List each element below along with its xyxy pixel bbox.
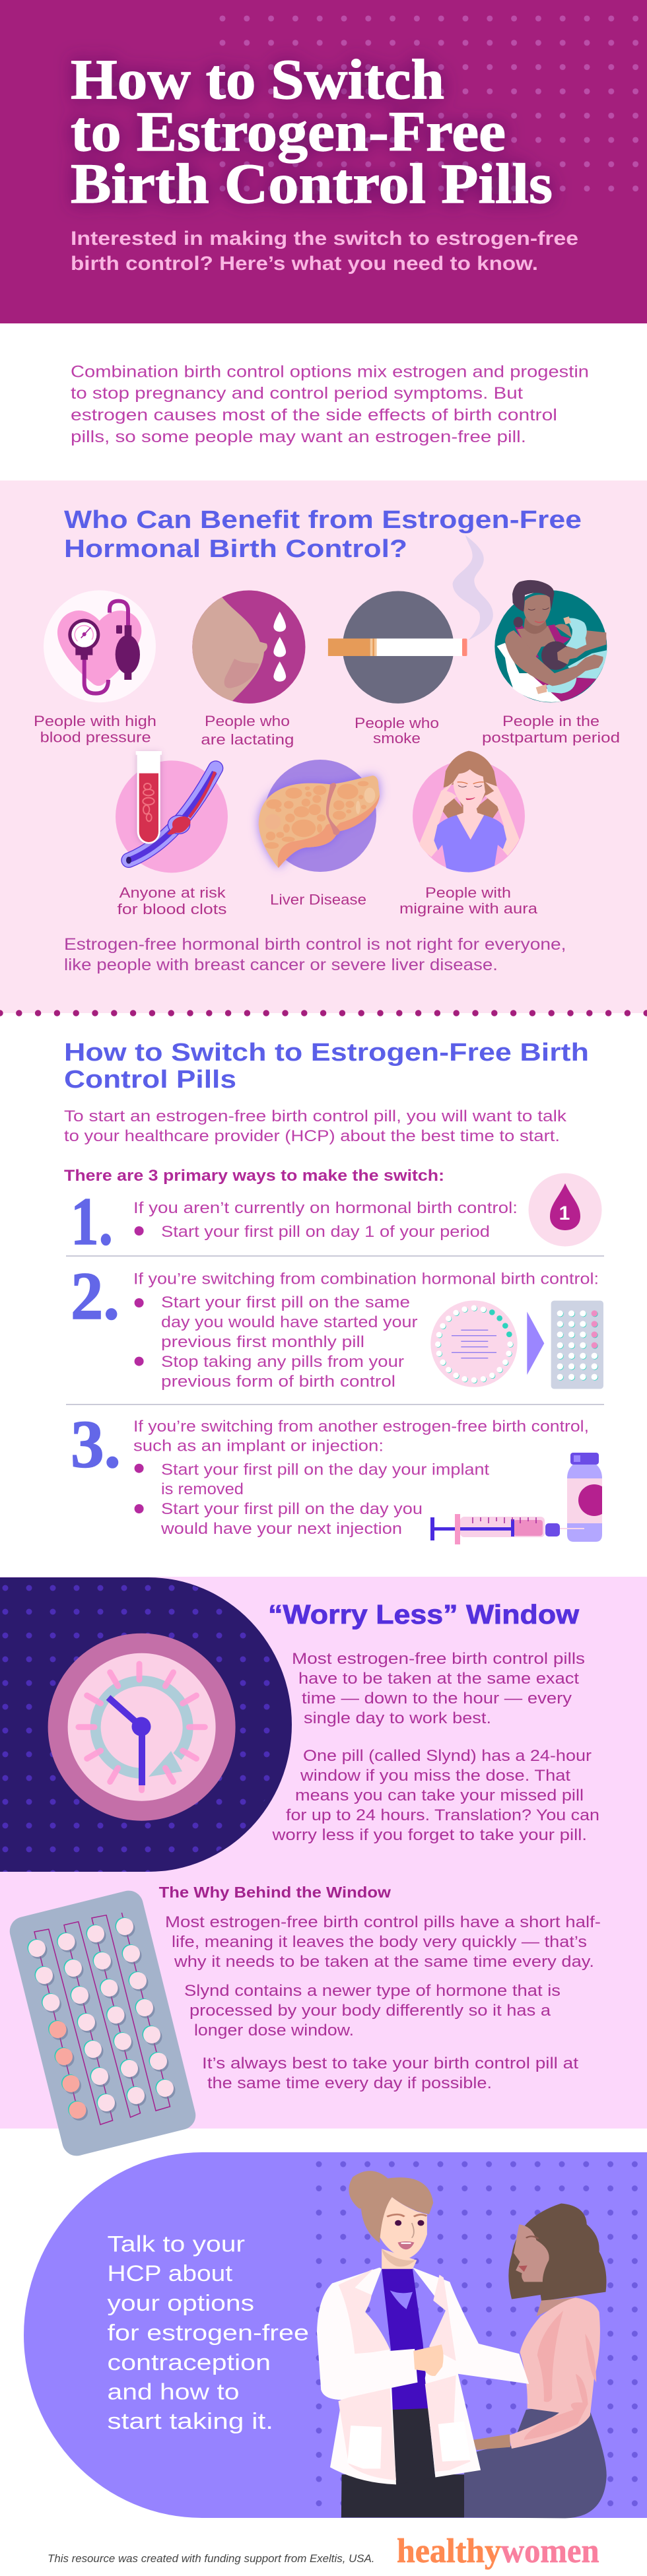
callout text: your options <box>107 2291 254 2316</box>
logo: healthywomen: women <box>501 2532 599 2570</box>
illustration: pill pack <box>7 1888 199 2159</box>
panel: how to switch <box>64 1039 610 1544</box>
icon: lactating <box>192 590 305 704</box>
callout text: start taking it. <box>107 2409 273 2434</box>
panel: worry less window <box>0 1577 647 2129</box>
intro text <box>71 363 589 446</box>
title <box>71 48 553 215</box>
step 2: previous first monthly pill <box>161 1333 364 1351</box>
step 3: If you’re switching from another estrogen-free birth control, <box>133 1418 589 1436</box>
step 1: Start your first pill on day 1 of your period <box>161 1223 490 1241</box>
icon labels: People in the <box>502 713 599 729</box>
heading: who can benefit <box>64 506 582 563</box>
logo: healthywomen: healthy <box>397 2532 501 2570</box>
title: to Estrogen-Free <box>71 100 506 163</box>
heading: worry less window: “Worry Less” Window <box>268 1599 579 1630</box>
subtitle: Interested in making the switch to estrogen-free <box>71 228 578 249</box>
intro text: pills, so some people may want an estrogen-free pill. <box>71 428 526 446</box>
text: why behind the window: Slynd contains a newer type of hormone that is <box>184 1982 561 2000</box>
step 2 <box>71 1259 603 1391</box>
icon: blood clot <box>116 751 228 873</box>
heading: who can benefit: Hormonal Birth Control? <box>64 535 407 563</box>
heading: how to switch <box>64 1039 589 1094</box>
icon: vial <box>567 1453 602 1542</box>
text: why behind the window: why it needs to be taken at the same time every day. <box>174 1953 594 1971</box>
note: not right for everyone: like people with breast cancer or severe liver disease. <box>64 956 498 974</box>
callout text: contraception <box>107 2350 271 2375</box>
icon labels: for blood clots <box>118 901 227 917</box>
icon labels: Anyone at risk <box>119 884 226 901</box>
intro paragraph: To start an estrogen-free birth control pill, you will want to talk <box>64 1107 567 1125</box>
step 1: 1. <box>71 1184 113 1259</box>
callout text <box>107 2232 309 2434</box>
step 3 <box>73 1420 602 1544</box>
step 3: Start your first pill on the day you <box>161 1500 423 1518</box>
icon labels <box>34 713 620 917</box>
icon: blood pressure <box>44 590 156 702</box>
icon: liver <box>259 760 380 872</box>
subheading: three ways: There are 3 primary ways to make the switch: <box>64 1167 444 1185</box>
text: worry less explanation: time — down to the hour — every <box>302 1690 572 1707</box>
text: worry less explanation: One pill (called Slynd) has a 24-hour <box>303 1747 592 1765</box>
icon labels: People who <box>355 715 439 731</box>
text: why behind the window: longer dose window. <box>194 2022 354 2039</box>
logo: healthywomen <box>397 2532 599 2570</box>
icon: clock <box>48 1634 236 1821</box>
icon labels: People who <box>205 713 290 729</box>
dark shape with clock <box>0 1577 292 1872</box>
intro text: to stop pregnancy and control period symptoms. But <box>71 384 523 403</box>
icon: blood drop <box>528 1173 602 1246</box>
text: worry less explanation <box>271 1650 599 1844</box>
text: why behind the window: Most estrogen-free birth control pills have a short half- <box>165 1913 601 1931</box>
step 3: such as an implant or injection: <box>133 1437 384 1455</box>
subtitle: birth control? Here’s what you need to know. <box>71 253 538 275</box>
intro text: estrogen causes most of the side effects of birth control <box>71 406 557 424</box>
step 2: day you would have started your <box>161 1313 417 1331</box>
text: why behind the window: life, meaning it leaves the body very quickly — that’s <box>172 1933 587 1951</box>
step 3: would have your next injection <box>160 1520 402 1538</box>
step 2: Stop taking any pills from your <box>161 1353 404 1371</box>
step 3: 3. <box>71 1407 121 1482</box>
heading: how to switch: How to Switch to Estrogen-Free Birth <box>64 1039 589 1067</box>
step 1: If you aren’t currently on hormonal birth control: <box>133 1199 518 1217</box>
title: Birth Control Pills <box>71 152 553 215</box>
icon labels: smoke <box>373 730 421 746</box>
step 2: Start your first pill on the same <box>161 1294 410 1311</box>
illustration: doctor <box>317 2171 529 2517</box>
subheading: why behind the window: The Why Behind the Window <box>159 1884 391 1901</box>
heading: who can benefit: Who Can Benefit from Estrogen-Free <box>64 506 582 534</box>
icon labels: People with <box>425 884 511 901</box>
intro text: Combination birth control options mix estrogen and progestin <box>71 363 589 381</box>
icon: cigarette and smoke <box>328 535 493 704</box>
icon labels: People with high <box>34 713 156 729</box>
intro paragraph <box>64 1107 567 1145</box>
text: worry less explanation: for up to 24 hours. Translation? You can <box>286 1806 599 1824</box>
text: why behind the window: processed by your body differently so it has a <box>189 2002 551 2020</box>
step 2: 2. <box>71 1259 119 1334</box>
heading: how to switch: Control Pills <box>64 1066 236 1094</box>
icon labels: migraine with aura <box>399 900 538 917</box>
footer credit: This resource was created with funding support from Exeltis, USA. <box>48 2552 375 2565</box>
panel: talk to your hcp <box>24 2152 647 2518</box>
icon: migraine <box>413 751 525 873</box>
callout text: and how to <box>107 2380 239 2405</box>
text: worry less explanation: have to be taken at the same exact <box>298 1670 579 1688</box>
icon: blood drop: 1 <box>559 1203 570 1224</box>
text: worry less explanation: means you can take your missed pill <box>295 1787 584 1804</box>
step 1 <box>71 1173 602 1259</box>
panel: header <box>0 0 647 323</box>
icon: postpartum mother and baby <box>494 580 607 702</box>
icon labels: Liver Disease <box>270 891 366 908</box>
callout text: Talk to your <box>107 2232 245 2257</box>
callout text: for estrogen-free <box>107 2321 309 2346</box>
step 3: Start your first pill on the day your implant <box>161 1461 489 1478</box>
subtitle <box>71 228 578 275</box>
note: not right for everyone: Estrogen-free hormonal birth control is not right for everyone, <box>64 935 566 954</box>
step 2: If you’re switching from combination hormonal birth control: <box>133 1270 599 1288</box>
step 3: is removed <box>161 1480 244 1498</box>
step 2: previous form of birth control <box>161 1373 395 1391</box>
text: worry less explanation: worry less if you forget to take your pill. <box>271 1826 587 1844</box>
text: worry less explanation: single day to work best. <box>304 1709 491 1727</box>
icon labels: blood pressure <box>40 729 151 746</box>
icon labels: are lactating <box>201 731 294 748</box>
text: why behind the window <box>165 1913 601 2092</box>
callout text: HCP about <box>107 2261 233 2286</box>
intro paragraph: to your healthcare provider (HCP) about the best time to start. <box>64 1127 560 1145</box>
panel: who can benefit <box>0 480 647 1013</box>
text: worry less explanation: Most estrogen-free birth control pills <box>292 1650 585 1668</box>
title: How to Switch <box>71 48 444 111</box>
note: not right for everyone <box>64 935 566 974</box>
icon: syringe <box>430 1514 584 1544</box>
text: why behind the window: the same time every day if possible. <box>207 2074 492 2092</box>
illustration: patient <box>464 2203 607 2518</box>
icon labels: postpartum period <box>482 729 620 746</box>
icon: pill switch <box>430 1300 603 1389</box>
text: why behind the window: It’s always best to take your birth control pill at <box>202 2055 578 2072</box>
text: worry less explanation: window if you miss the dose. That <box>300 1767 570 1785</box>
